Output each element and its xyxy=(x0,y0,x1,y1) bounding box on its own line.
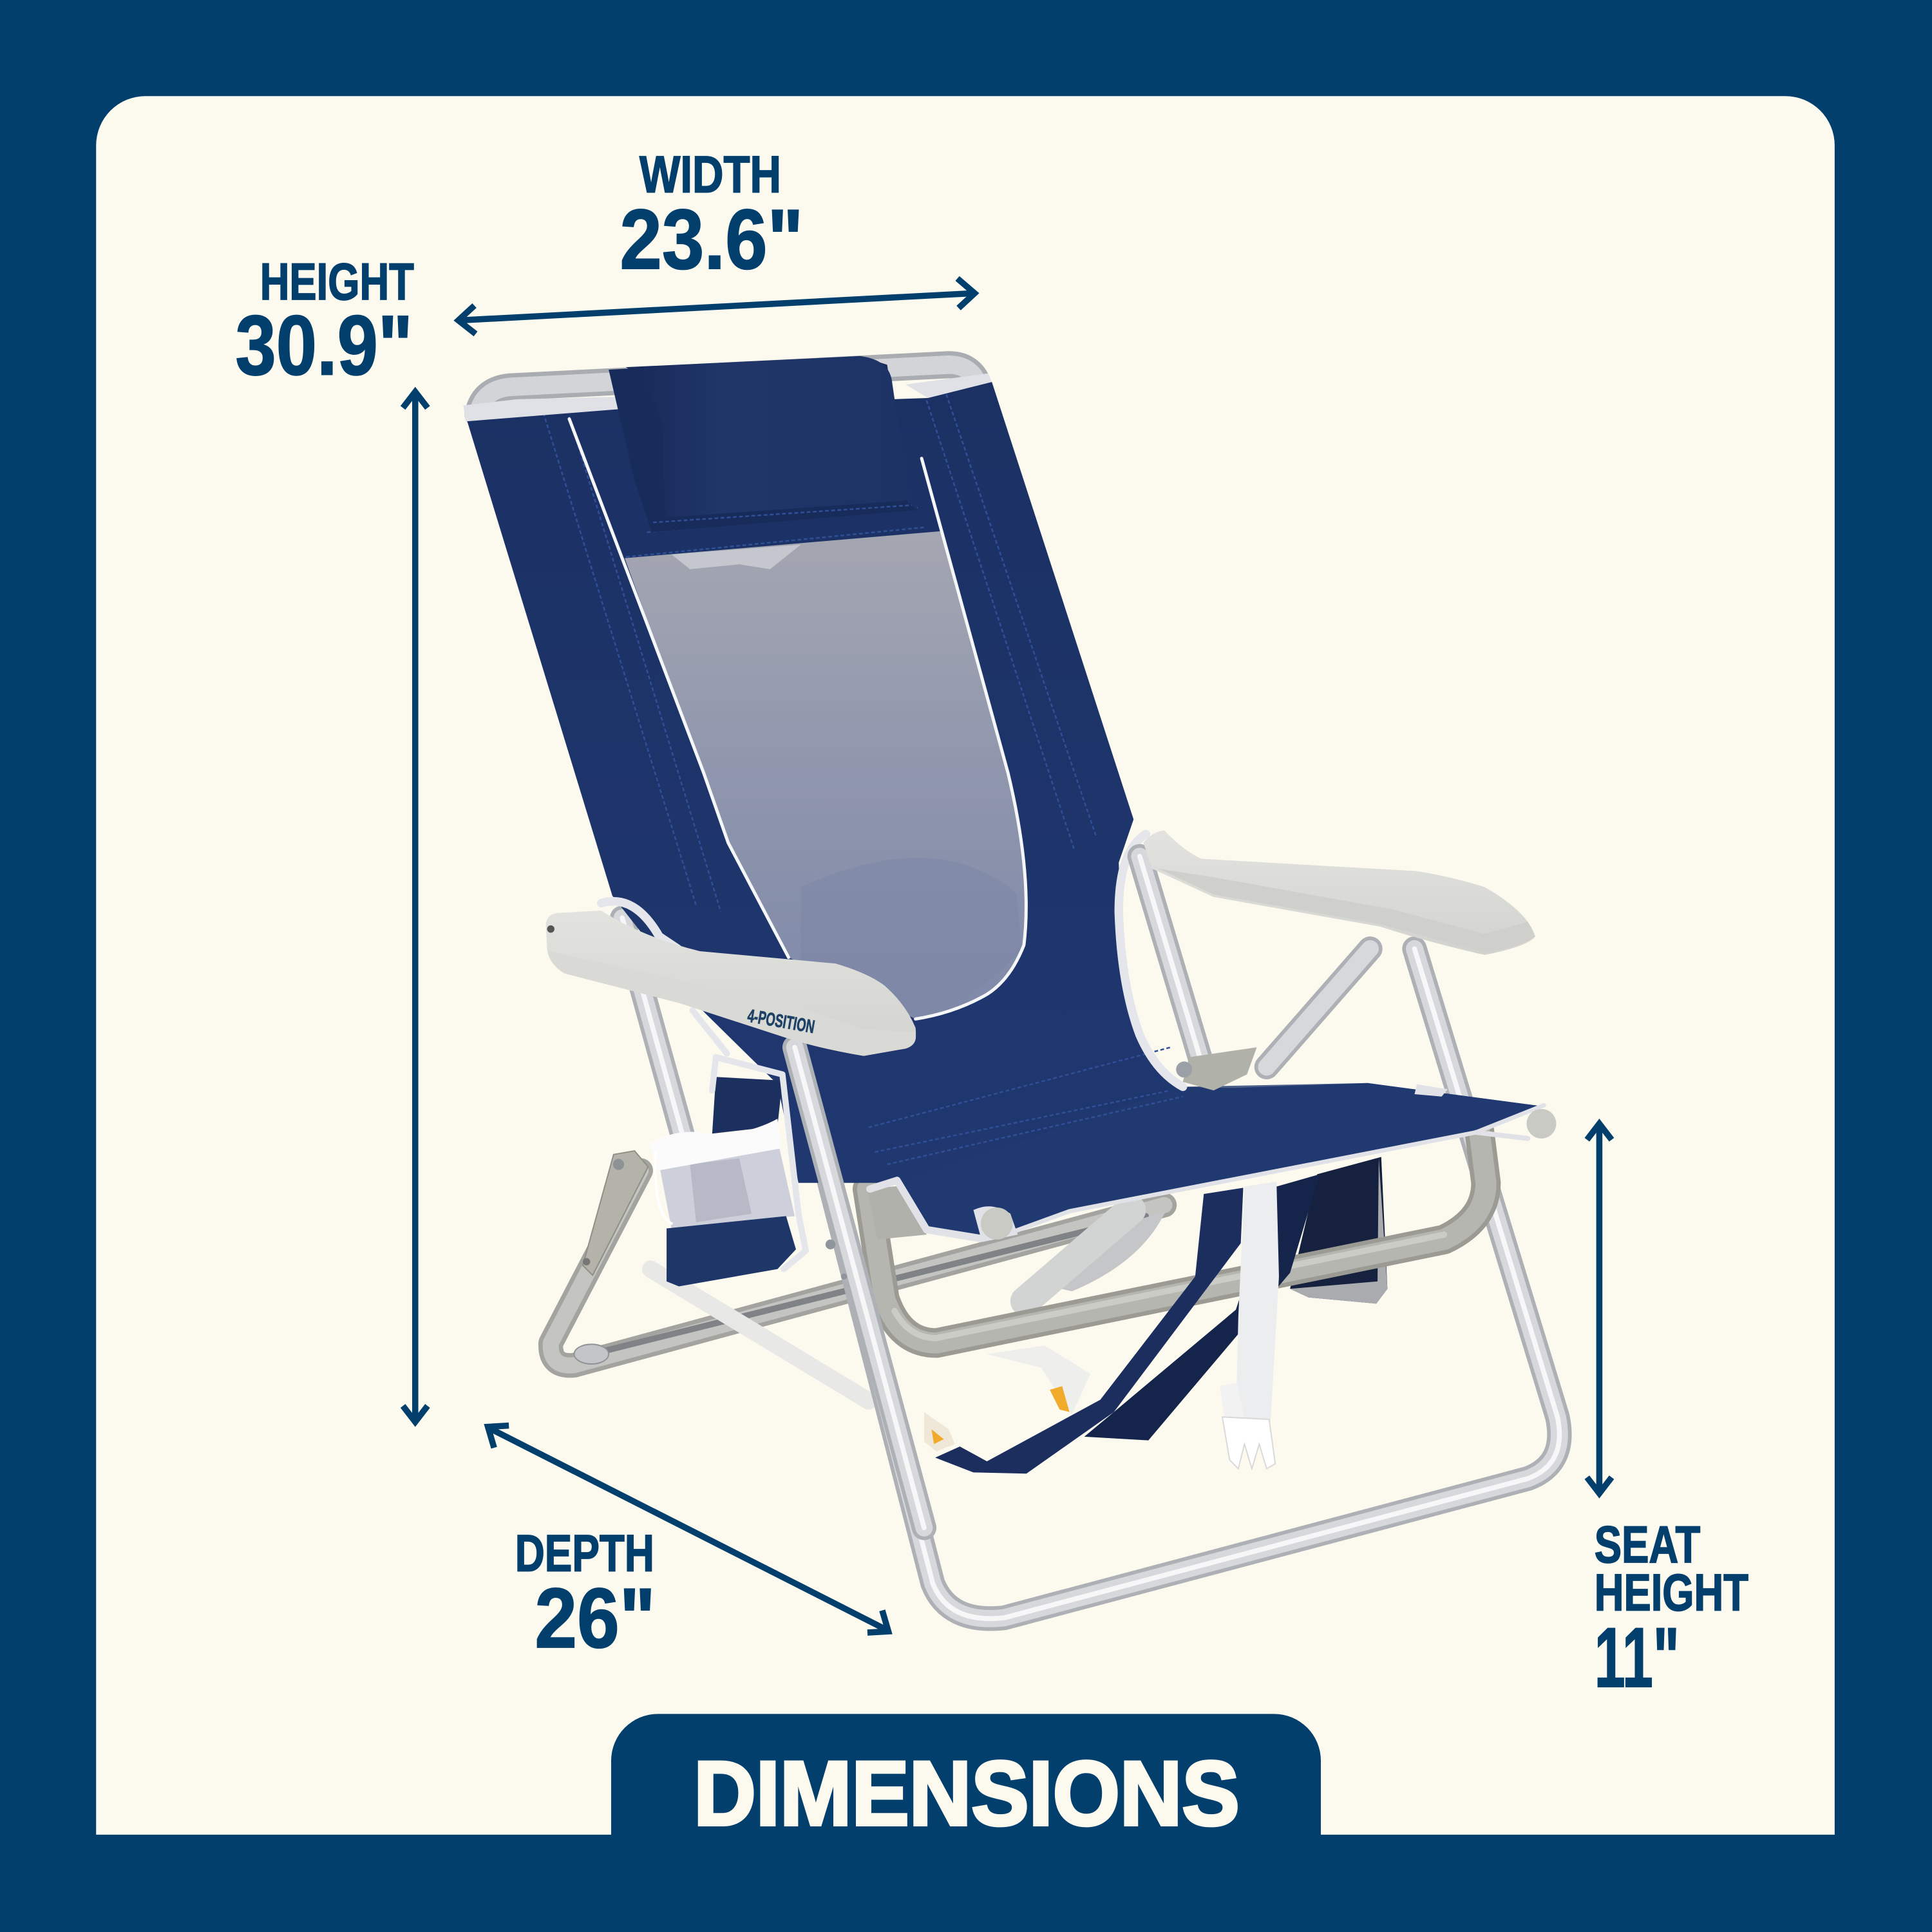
label: height xyxy=(235,253,414,393)
label: depth xyxy=(515,1524,656,1665)
left armrest trim straps xyxy=(601,902,727,1054)
label: height: 30.9" xyxy=(235,298,413,393)
right armrest trim xyxy=(1119,834,1183,1087)
main leg frame xyxy=(795,949,1559,1618)
title tab xyxy=(611,1714,1321,1845)
seat hinge block xyxy=(867,1186,927,1240)
front left leg xyxy=(795,1047,924,1528)
back mesh panel xyxy=(625,531,1026,1019)
seat height arrow xyxy=(1587,1124,1612,1493)
fabric trim at top xyxy=(463,374,992,421)
rear pivot plate xyxy=(583,1151,648,1275)
white strap hardware xyxy=(924,1345,1090,1452)
white strap with buckle xyxy=(1220,1182,1279,1469)
grey side strap xyxy=(1025,1210,1131,1301)
title: DIMENSIONS xyxy=(694,1743,1240,1845)
height arrow xyxy=(403,392,428,1422)
white piping xyxy=(569,419,1026,1019)
label: height: HEIGHT xyxy=(260,253,414,311)
label: width: WIDTH xyxy=(639,146,781,204)
label: seat height: 11" xyxy=(1595,1609,1680,1705)
label: width: 23.6" xyxy=(620,191,803,287)
seat sling fabric xyxy=(466,382,1544,1238)
label: seat height: HEIGHT xyxy=(1595,1564,1748,1622)
label: seat height xyxy=(1595,1516,1748,1705)
cup holder xyxy=(649,1057,806,1286)
fabric stitching xyxy=(544,394,1183,1164)
label: seat height: SEAT xyxy=(1595,1516,1700,1574)
inner seat support tube xyxy=(867,1115,1486,1343)
navy shoulder strap front xyxy=(935,1188,1243,1473)
top frame bar xyxy=(478,365,980,414)
right armrest xyxy=(1144,831,1535,955)
seat rod end caps xyxy=(981,1109,1556,1240)
label: width xyxy=(620,146,803,287)
label: depth: 26" xyxy=(535,1570,656,1665)
lower carry strap xyxy=(650,1269,869,1401)
armrest label: 4-POSITION xyxy=(746,1005,816,1037)
navy shoulder strap rear xyxy=(1084,1174,1320,1441)
seat shading xyxy=(897,1083,1544,1238)
depth arrow xyxy=(488,1426,888,1633)
width arrow xyxy=(459,278,974,334)
seat front trim xyxy=(870,1084,1544,1242)
under-seat backpack pouch xyxy=(1290,1157,1387,1303)
headrest pillow xyxy=(609,356,918,533)
right rear upright xyxy=(1140,857,1201,1062)
left armrest xyxy=(546,911,916,1056)
right hinge xyxy=(1176,1047,1257,1090)
label: depth: DEPTH xyxy=(515,1524,654,1582)
chair product illustration xyxy=(463,356,1559,1618)
rear folding frame xyxy=(551,918,1370,1365)
